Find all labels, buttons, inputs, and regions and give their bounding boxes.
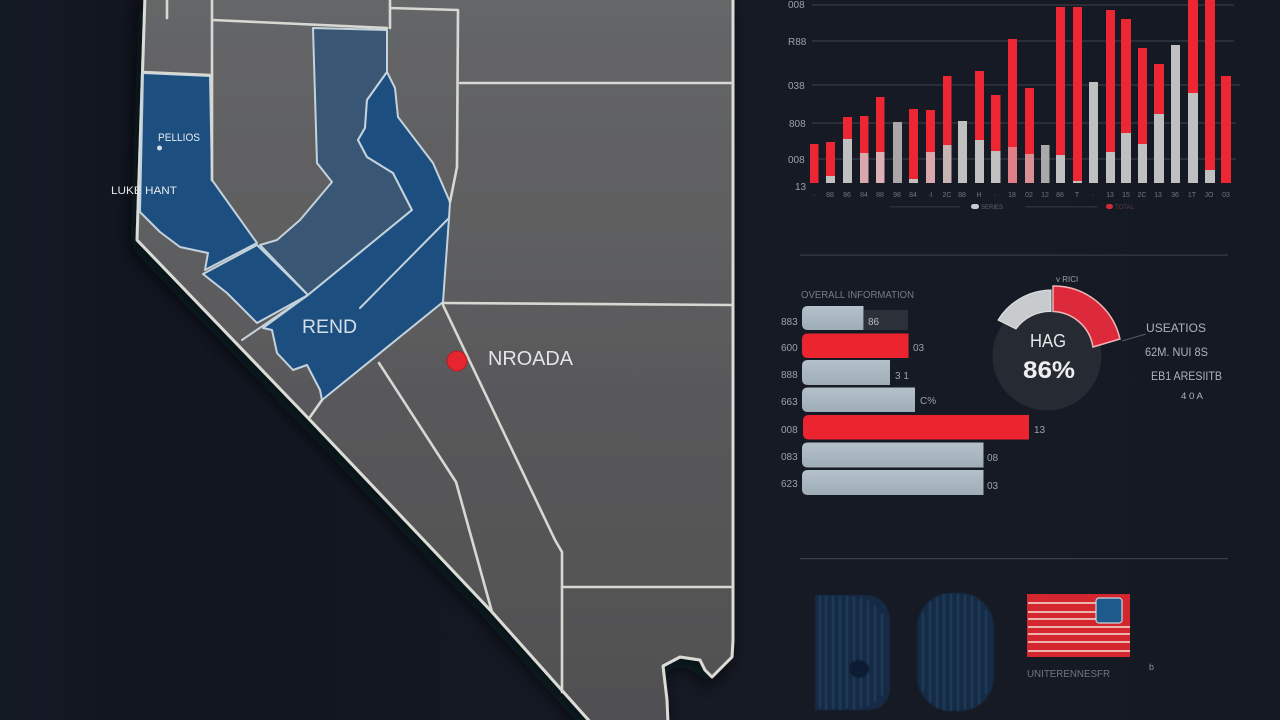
map label: west: LUKE HANT xyxy=(111,185,177,197)
county: Reno blue xyxy=(263,72,450,400)
chart x axis labels: 13 xyxy=(1106,192,1114,199)
gauge side notes: EB1 ARESIITB xyxy=(1151,371,1222,383)
county: central slate blue xyxy=(260,28,412,295)
map label: NROADA: NROADA xyxy=(488,348,574,370)
horizontal bars xyxy=(802,306,1029,495)
chart x axis labels: 18 xyxy=(1008,192,1016,199)
chart y axis labels xyxy=(788,0,807,193)
chart y axis labels: 008 xyxy=(788,155,805,166)
icon: flag xyxy=(1027,594,1130,657)
gauge leader line xyxy=(1122,334,1146,341)
chart x axis labels: · xyxy=(813,192,815,199)
donut gauge xyxy=(992,275,1222,410)
map marker: red location pin xyxy=(447,351,467,371)
map marker: small dot xyxy=(157,146,162,150)
horizontal chart heading: OVERALL INFORMATION xyxy=(801,290,914,301)
chart y axis labels: 038 xyxy=(788,81,805,92)
chart x axis labels: 86 xyxy=(1056,192,1064,199)
chart: horizontal bars xyxy=(781,290,1046,495)
chart x axis labels: 12 xyxy=(1041,192,1049,199)
chart x axis labels: 2C xyxy=(1138,192,1146,199)
county boundary lines xyxy=(143,0,732,692)
bar value labels: 03 xyxy=(987,481,999,492)
chart x axis labels: 36 xyxy=(1171,192,1179,199)
chart: stacked vertical bars xyxy=(788,0,1240,211)
chart x axis labels: 86 xyxy=(843,192,851,199)
gauge red arc xyxy=(1053,286,1120,347)
bar value labels xyxy=(868,317,1046,492)
bar row labels: 663 xyxy=(781,397,798,408)
bar row labels: 623 xyxy=(781,479,798,490)
gauge dark disc xyxy=(992,302,1102,410)
chart y axis labels: 808 xyxy=(789,119,806,130)
chart x axis labels: · xyxy=(994,192,996,199)
chart x axis labels: 84 xyxy=(909,192,917,199)
faded bar behind first value xyxy=(864,310,908,330)
chart y axis labels: R88 xyxy=(788,37,807,48)
chart red bar segments xyxy=(810,0,1231,183)
bar value labels: 03 xyxy=(913,343,925,354)
bar row labels: 600 xyxy=(781,343,798,354)
flag side mark: b xyxy=(1149,662,1154,672)
bar row labels: 888 xyxy=(781,370,798,381)
chart x axis labels: ·I xyxy=(928,192,932,199)
chart x axis labels: T xyxy=(1075,192,1080,199)
bar value labels: 08 xyxy=(987,453,999,464)
icon: textured oval block xyxy=(917,593,994,711)
gauge side notes: 62M. NUI 8S xyxy=(1145,347,1208,359)
bar row labels: 083 xyxy=(781,452,798,463)
chart x axis labels xyxy=(813,192,1230,199)
gauge side notes xyxy=(1145,323,1222,401)
chart x axis labels: 88 xyxy=(958,192,966,199)
county: western blue xyxy=(140,73,257,270)
gauge side notes: 4 0 A xyxy=(1181,391,1203,401)
bar row labels: 008 xyxy=(781,425,798,436)
bar value labels: 13 xyxy=(1034,425,1046,436)
chart x axis labels: 13 xyxy=(1154,192,1162,199)
gauge grey arc xyxy=(998,290,1051,329)
chart x axis labels: JO xyxy=(1205,192,1214,199)
map: Nevada counties xyxy=(137,0,733,720)
chart legend: SERIES xyxy=(981,205,1003,211)
chart grey bar segments xyxy=(826,45,1215,183)
chart x axis labels: 98 xyxy=(893,192,901,199)
divider top xyxy=(800,254,1228,256)
map label: REND: REND xyxy=(302,317,357,338)
chart y axis labels: 008 xyxy=(788,0,805,11)
chart x axis labels: 1T xyxy=(1188,192,1197,199)
chart x axis labels: 2C xyxy=(943,192,951,199)
county: lower small blue xyxy=(203,245,308,323)
gauge centre label: HAG xyxy=(1030,331,1066,351)
chart x axis labels: H xyxy=(976,192,982,199)
chart legend: TOTAL xyxy=(1115,205,1134,211)
map landmass outline xyxy=(137,0,733,720)
bar row labels xyxy=(781,317,798,490)
bar row labels: 883 xyxy=(781,317,798,328)
chart y axis labels: 13 xyxy=(795,182,807,193)
gauge side notes: USEATIOS xyxy=(1146,323,1206,335)
chart x axis labels: 15 xyxy=(1122,192,1130,199)
chart x axis labels: 88 xyxy=(826,192,834,199)
bar value labels: 3 1 xyxy=(895,371,909,382)
inner county lines on blue xyxy=(242,218,449,340)
bar value labels: C% xyxy=(920,396,936,407)
chart x axis labels: · xyxy=(1092,192,1094,199)
gauge caption top: v RICI xyxy=(1056,275,1078,284)
gauge centre value: 86% xyxy=(1023,357,1075,384)
map label: small county: PELLIOS xyxy=(158,132,200,144)
divider bottom xyxy=(800,558,1228,559)
icon: textured letter block xyxy=(815,595,890,710)
chart gridlines xyxy=(812,5,1240,159)
flag caption: UNITERENNESFR xyxy=(1027,669,1110,680)
bar value labels: 86 xyxy=(868,317,880,328)
chart x axis labels: 88 xyxy=(876,192,884,199)
chart x axis labels: 03 xyxy=(1222,192,1230,199)
chart x axis labels: 02 xyxy=(1025,192,1033,199)
chart x axis labels: 84 xyxy=(860,192,868,199)
chart legend xyxy=(890,204,1134,211)
